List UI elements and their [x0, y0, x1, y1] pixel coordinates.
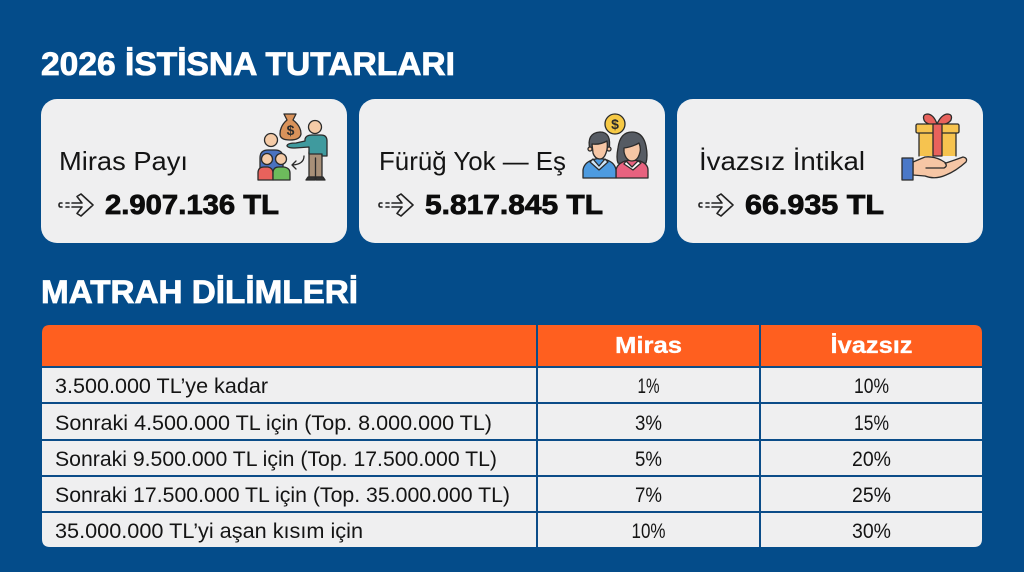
row 3: 20%: [852, 448, 891, 471]
row 1: 3.500.000 TL’ye kadar: [55, 375, 268, 398]
value: ivazsız intikal: 66.935 TL: [745, 189, 884, 220]
icon: couple with coin: [583, 114, 648, 178]
table: matrah dilimleri: [42, 325, 982, 547]
row 5: 30%: [852, 520, 891, 543]
icon: arrow: [379, 194, 413, 216]
row 1: 1%: [638, 375, 660, 398]
icon: couple with coin: $: [611, 116, 619, 132]
panel: miras payı: [41, 99, 347, 243]
row 1: [55, 375, 889, 398]
row 4: 25%: [852, 484, 891, 507]
row 5: 35.000.000 TL’yi aşan kısım için: [55, 520, 363, 543]
row 4: Sonraki 17.500.000 TL için (Top. 35.000.000 TL): [55, 484, 510, 507]
table header: [42, 325, 982, 367]
column heading: miras: Miras: [615, 332, 682, 358]
row 4: [55, 484, 891, 507]
row 2: [55, 412, 889, 435]
row 2: 3%: [635, 412, 662, 435]
row 4: 7%: [635, 484, 662, 507]
row 5: [55, 520, 891, 543]
icon: arrow: [59, 194, 93, 216]
row 3: [55, 448, 891, 471]
title: 2026 İSTİSNA TUTARLARI: [41, 46, 455, 82]
value: miras payı: 2.907.136 TL: [105, 189, 279, 220]
icon: arrow: [699, 194, 733, 216]
panel: ivazsız intikal: [677, 99, 983, 243]
heading: matrah dilimleri: MATRAH DİLİMLERİ: [41, 274, 358, 310]
row 2: 15%: [854, 412, 889, 435]
icon: family receiving money bag: $: [287, 122, 295, 138]
label: ivazsız intikal: İvazsız İntikal: [699, 146, 865, 176]
column heading: ivazsız: İvazsız: [830, 332, 912, 358]
icon: family receiving money bag: [258, 114, 327, 180]
label: fürüğ yok eş: Fürüğ Yok — Eş: [379, 146, 566, 176]
row 1: 10%: [854, 375, 889, 398]
icon: gift on hand: [902, 114, 967, 180]
panel: fürüğ yok eş: [359, 99, 665, 243]
value: fürüğ yok eş: 5.817.845 TL: [425, 189, 603, 220]
label: miras payı: Miras Payı: [59, 146, 188, 176]
row 2: Sonraki 4.500.000 TL için (Top. 8.000.000 TL): [55, 412, 492, 435]
row 3: Sonraki 9.500.000 TL için (Top. 17.500.000 TL): [55, 448, 497, 471]
row 3: 5%: [635, 448, 662, 471]
row 5: 10%: [632, 520, 666, 543]
